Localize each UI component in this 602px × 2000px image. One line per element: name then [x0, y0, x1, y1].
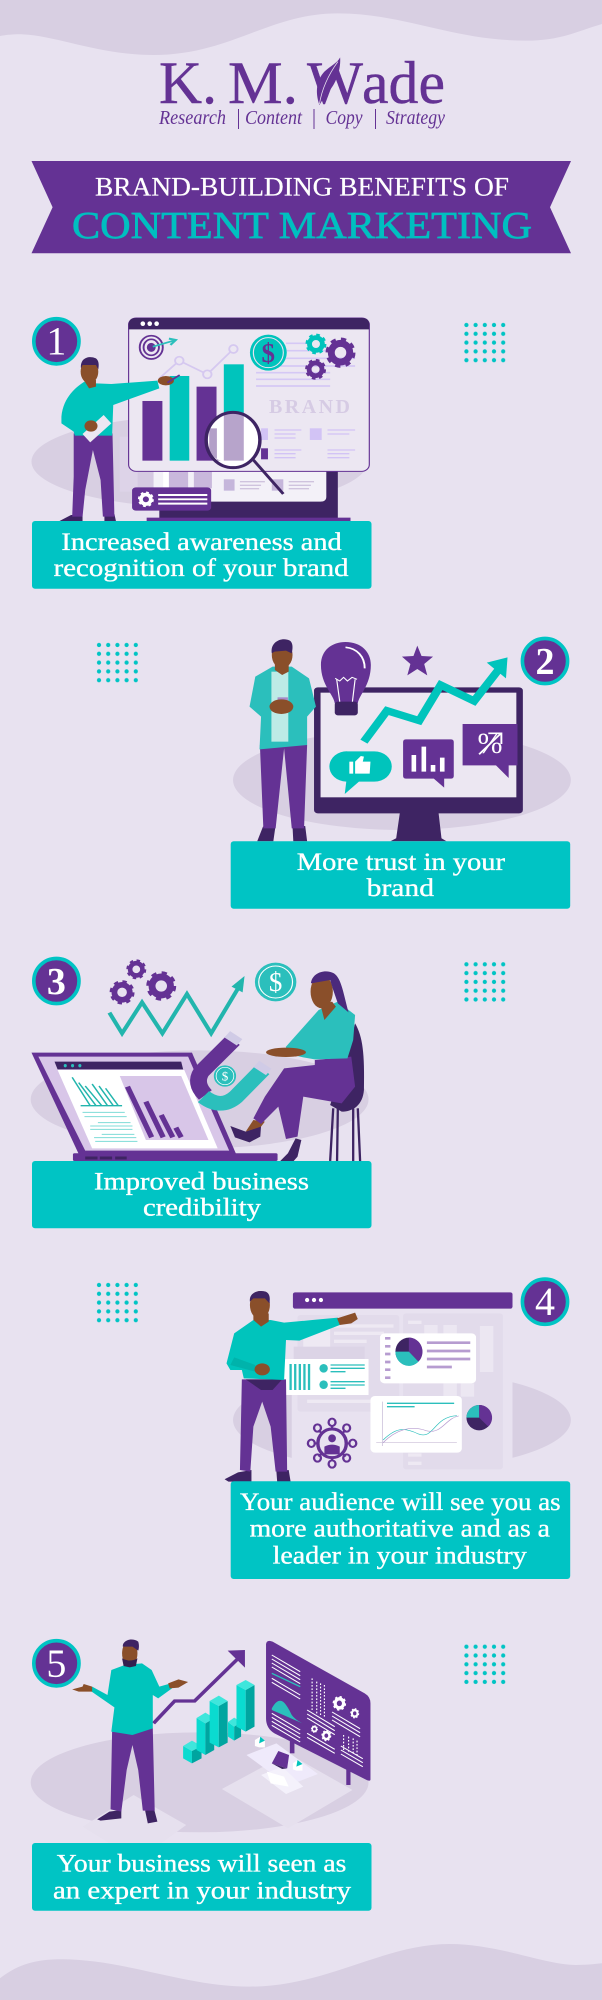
- icon: light bulb: [321, 642, 371, 715]
- caption 4: more authoritative and as a: [250, 1516, 550, 1543]
- number badge 4: [522, 1279, 568, 1324]
- illustration: expert with isometric board: [31, 1640, 370, 1843]
- section 5: [31, 1640, 506, 1911]
- isometric board: [266, 1641, 370, 1785]
- card: table: [284, 1359, 369, 1395]
- number badge 3: 3: [47, 961, 66, 1003]
- icon: target with arrow: [140, 336, 176, 359]
- card: pie chart: [380, 1333, 476, 1383]
- caption 2: [231, 841, 570, 909]
- bubble: percent: [463, 724, 517, 778]
- caption 1: [32, 521, 372, 589]
- caption 5: Your business will seen as: [57, 1851, 346, 1878]
- number badge 3: [34, 958, 79, 1004]
- isometric bars: [183, 1680, 255, 1763]
- decorative dot grid: [464, 962, 506, 1002]
- caption 5: [32, 1843, 372, 1911]
- title line 1: BRAND-BUILDING BENEFITS OF: [95, 173, 509, 202]
- coin symbol: $: [262, 338, 275, 368]
- icon: gears: [112, 961, 174, 1003]
- section 4: [97, 1279, 571, 1579]
- lower content blocks: [261, 428, 355, 459]
- text lines: [256, 343, 355, 386]
- bubble: bar chart: [403, 739, 454, 788]
- bar chart: [142, 364, 244, 461]
- zigzag growth arrow: [109, 976, 245, 1033]
- caption 4: [231, 1481, 570, 1579]
- icon: dollar coin: [250, 335, 287, 371]
- small coin symbol: $: [222, 1068, 229, 1084]
- caption 2: More trust in your: [297, 849, 506, 876]
- rising arrow: [154, 1650, 245, 1723]
- percent symbol: %: [478, 727, 502, 760]
- section 3: [31, 958, 506, 1228]
- number badge 1: 1: [46, 318, 66, 364]
- top wave: [0, 0, 602, 55]
- desk with laptop: [246, 1737, 318, 1794]
- man with phone: [250, 639, 316, 841]
- logo tagline: [158, 107, 445, 129]
- title line 2: CONTENT MARKETING: [72, 205, 532, 247]
- icon: dollar coin: [255, 963, 296, 1001]
- caption 3: Improved business: [94, 1168, 309, 1195]
- coin symbol: $: [269, 967, 282, 997]
- number badge 1: [34, 318, 79, 364]
- settings card: [132, 487, 211, 511]
- monitor stand: [137, 470, 351, 521]
- logo tagline: Research: [158, 107, 226, 129]
- logo wordmark: W: [307, 50, 363, 116]
- desk platform: [222, 1753, 352, 1828]
- illustration: presenter with brand analytics screen: [31, 318, 369, 521]
- decorative dot grid: [97, 643, 138, 683]
- caption 5: an expert in your industry: [53, 1877, 352, 1904]
- person platform: [83, 1795, 186, 1843]
- icon: horseshoe magnet: [198, 1034, 269, 1103]
- decorative dot grid: [97, 1283, 138, 1323]
- background dashboard panels: [294, 1313, 503, 1469]
- expert figure: [72, 1640, 188, 1823]
- pie chart: [466, 1405, 492, 1430]
- number badge 2: 2: [536, 641, 554, 683]
- brand watermark: BRAND: [269, 396, 350, 418]
- illustration: woman with magnet and laptop: [31, 961, 369, 1161]
- monitor: [314, 687, 523, 841]
- caption 4: Your audience will see you as: [240, 1489, 561, 1516]
- card: line graph: [370, 1396, 462, 1453]
- caption 1: Increased awareness and: [61, 529, 342, 556]
- header bar: [293, 1292, 513, 1309]
- number badge 2: [522, 638, 568, 684]
- browser window: [129, 318, 369, 471]
- bottom wave: [0, 1944, 602, 2000]
- icon: star: [402, 646, 433, 675]
- icon: feather quill: [317, 57, 340, 105]
- caption 3: credibility: [143, 1194, 262, 1221]
- number badge 5: [34, 1641, 79, 1686]
- section 2: [97, 638, 571, 909]
- presenter figure: [225, 1291, 358, 1482]
- illustration: presenter with dashboards: [225, 1291, 571, 1482]
- logo wordmark: K.: [159, 50, 217, 116]
- illustration: man with phone and monitor: [233, 639, 571, 841]
- number badge 4: 4: [535, 1279, 555, 1324]
- laptop: [31, 1053, 278, 1161]
- caption 4: leader in your industry: [273, 1542, 527, 1569]
- logo wordmark: [159, 50, 445, 116]
- line chart: [159, 349, 233, 378]
- caption 1: recognition of your brand: [54, 555, 349, 582]
- small magnet coin: [214, 1065, 236, 1087]
- icon: gears: [307, 335, 353, 378]
- caption 2: brand: [367, 875, 435, 902]
- presenter figure: [60, 357, 180, 521]
- growth arrow: [364, 657, 508, 742]
- number badge 5: 5: [46, 1641, 66, 1686]
- section 1: [31, 318, 506, 589]
- decorative dot grid: [464, 1644, 506, 1684]
- logo tagline: Strategy: [386, 107, 445, 129]
- title banner: [32, 161, 571, 253]
- logo: [158, 50, 445, 129]
- logo tagline: Copy: [326, 107, 363, 129]
- caption 3: [32, 1161, 372, 1228]
- icon: magnifying glass: [206, 412, 283, 494]
- icon: audience network: [308, 1419, 356, 1468]
- decorative dot grid: [464, 323, 506, 363]
- logo tagline: Content: [245, 107, 302, 129]
- logo wordmark: M.: [228, 50, 298, 116]
- logo wordmark: ade: [362, 50, 445, 116]
- seated woman: [230, 971, 364, 1161]
- bubble: thumbs up: [329, 751, 392, 794]
